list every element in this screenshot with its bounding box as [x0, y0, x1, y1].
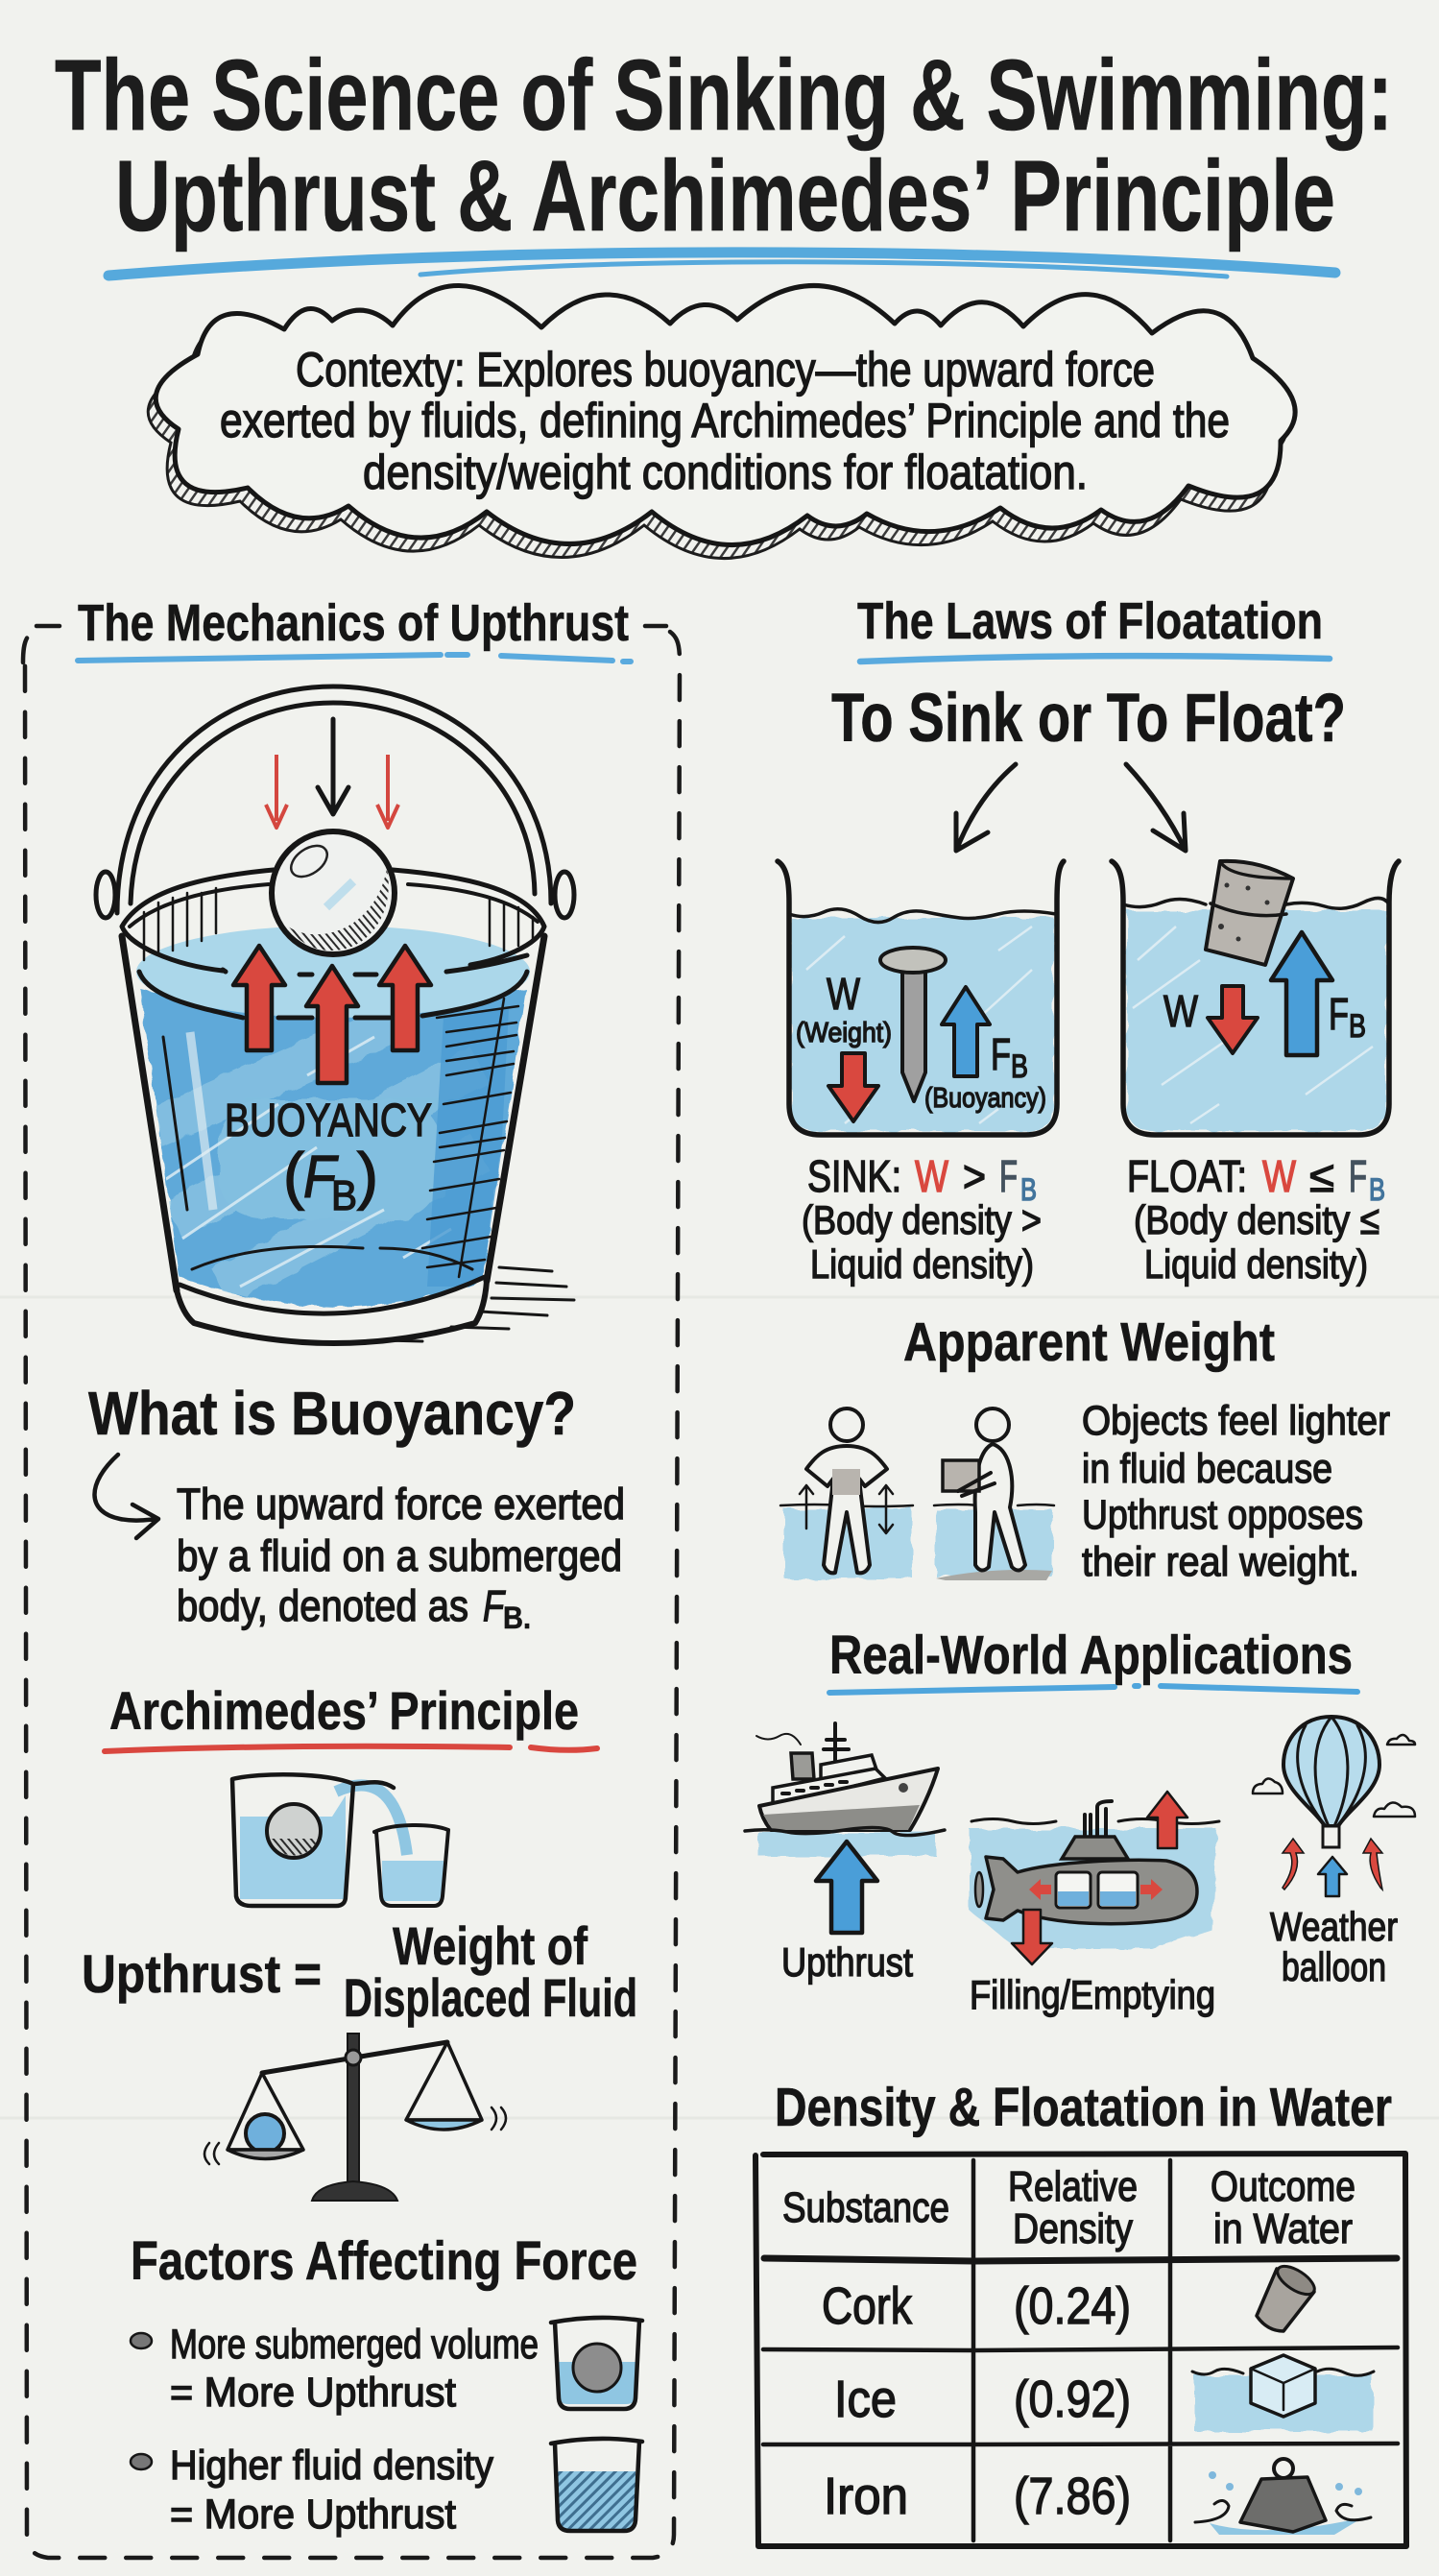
apparent weight: Apparent Weight [903, 1312, 1275, 1373]
what is buoyancy: body, denoted as [177, 1581, 468, 1630]
float condition: F [1349, 1151, 1367, 1201]
sink condition: (Body density > [802, 1197, 1042, 1242]
row: iron: Iron [824, 2468, 908, 2525]
heading: the mechanics of upthrust: The Mechanics of Upthrust [78, 594, 629, 652]
row: iron [824, 2459, 1371, 2535]
apparent weight [780, 1312, 1390, 1585]
row: cork [822, 2261, 1319, 2335]
title [55, 39, 1393, 253]
density table [755, 2154, 1406, 2546]
factor: fluid density [131, 2439, 642, 2538]
table header: in Water [1213, 2205, 1353, 2252]
table header: Substance [782, 2184, 949, 2231]
sink tank: F [991, 1029, 1011, 1079]
application: weather balloon: Weather [1270, 1904, 1398, 1949]
context cloud callout [148, 285, 1295, 559]
float tank: W [1163, 986, 1198, 1036]
icon: overflowing beakers [232, 1774, 448, 1906]
float condition [1127, 1151, 1385, 1287]
row: cork: (0.24) [1014, 2277, 1131, 2335]
float tank: F [1329, 989, 1349, 1039]
sink tank: B [1011, 1048, 1028, 1085]
table grid [755, 2154, 1406, 2546]
float condition: W [1262, 1151, 1296, 1201]
bucket illustration [96, 686, 574, 1343]
icon: nail [880, 948, 946, 1101]
row: ice: Ice [834, 2371, 897, 2428]
table header: Density [1013, 2205, 1133, 2252]
buoyancy label: B [331, 1172, 357, 1219]
what is buoyancy: What is Buoyancy? [88, 1379, 576, 1448]
factor: submerged volume: = More Upthrust [170, 2370, 456, 2416]
sink tank: (Buoyancy) [924, 1083, 1046, 1114]
row: ice: (0.92) [1014, 2371, 1131, 2428]
icon: person in water carrying box [934, 1408, 1054, 1580]
panel: the laws of floatation [745, 592, 1415, 2546]
float condition: ≤ [1309, 1151, 1334, 1201]
float condition: FLOAT: [1127, 1151, 1247, 1201]
sink condition: Liquid density) [810, 1241, 1034, 1287]
application: weather balloon: balloon [1282, 1944, 1386, 1989]
what is buoyancy: The upward force exerted [177, 1480, 625, 1529]
dashed panel border [23, 626, 680, 2558]
sink tank [778, 861, 1064, 1135]
what is buoyancy: by a fluid on a submerged [177, 1531, 622, 1580]
factor: fluid density: Higher fluid density [170, 2443, 493, 2489]
icon: cork [1206, 861, 1293, 965]
sink tank: W [827, 969, 860, 1019]
application: ship [745, 1723, 945, 1985]
table header [782, 2163, 1355, 2252]
float tank: B [1349, 1008, 1366, 1045]
buoyancy label [225, 1095, 432, 1219]
buoyancy label: BUOYANCY [225, 1095, 432, 1146]
context text: Contexty: Explores buoyancy—the upward force [296, 343, 1155, 397]
apparent weight: Objects feel lighter [1082, 1398, 1390, 1444]
float condition: Liquid density) [1144, 1241, 1368, 1287]
arrow: curved pointer [94, 1455, 158, 1538]
equation: upthrust equals weight of displaced fluid: Upthrust = [82, 1943, 322, 2004]
application: submarine: Filling/Emptying [970, 1972, 1215, 2017]
table header: Outcome [1211, 2163, 1355, 2210]
equation: upthrust equals weight of displaced fluid [82, 1915, 637, 2028]
title underline [108, 253, 1335, 277]
table header: Relative [1008, 2163, 1138, 2210]
application: weather balloon [1253, 1717, 1415, 1989]
sink condition: B [1020, 1172, 1037, 1207]
row: ice [834, 2355, 1374, 2431]
factor: submerged volume: More submerged volume [170, 2322, 539, 2368]
sink tank: (Weight) [796, 1018, 892, 1048]
what is buoyancy [88, 1379, 625, 1635]
icon: person in water hands on hips [780, 1408, 913, 1578]
float tank [1112, 861, 1399, 1135]
sink condition: F [999, 1151, 1018, 1201]
sink condition: > [963, 1151, 986, 1201]
float condition: (Body density ≤ [1134, 1197, 1379, 1242]
factor: submerged volume [131, 2318, 642, 2416]
heading: the laws of floatation: The Laws of Floatation [857, 592, 1323, 650]
equation: upthrust equals weight of displaced fluid: Weight of [393, 1915, 588, 1976]
sink condition: SINK: [807, 1151, 901, 1201]
context text [220, 343, 1230, 499]
icon: balance scale [204, 2034, 506, 2201]
float condition: B [1369, 1172, 1385, 1207]
factor: fluid density: = More Upthrust [170, 2492, 456, 2538]
sink condition [802, 1151, 1042, 1287]
factors affecting force: Factors Affecting Force [131, 2230, 637, 2292]
what is buoyancy: B. [503, 1601, 531, 1635]
row: iron: (7.86) [1014, 2468, 1131, 2525]
row: cork: Cork [822, 2277, 913, 2335]
what is buoyancy: F [483, 1581, 506, 1630]
apparent weight: in fluid because [1082, 1446, 1332, 1492]
buoyancy label: ) [357, 1140, 378, 1211]
application: submarine [970, 1792, 1219, 2017]
equation: upthrust equals weight of displaced fluid: Displaced Fluid [344, 1967, 637, 2028]
buoyancy label: F [303, 1144, 339, 1211]
context text: density/weight conditions for floatation. [363, 445, 1088, 499]
application: ship: Upthrust [781, 1939, 913, 1985]
arrow: to float [1126, 764, 1186, 851]
apparent weight: Upthrust opposes [1082, 1492, 1363, 1538]
factors affecting force [131, 2230, 642, 2538]
buoyancy label: ( [283, 1140, 304, 1211]
context text: exerted by fluids, defining Archimedes’ Principle and the [220, 394, 1230, 447]
archimedes' principle heading: Archimedes’ Principle [109, 1680, 579, 1741]
panel: the mechanics of upthrust [23, 594, 680, 2558]
sink condition: W [915, 1151, 948, 1201]
apparent weight: their real weight. [1082, 1539, 1359, 1585]
arrow: to sink [956, 764, 1016, 851]
